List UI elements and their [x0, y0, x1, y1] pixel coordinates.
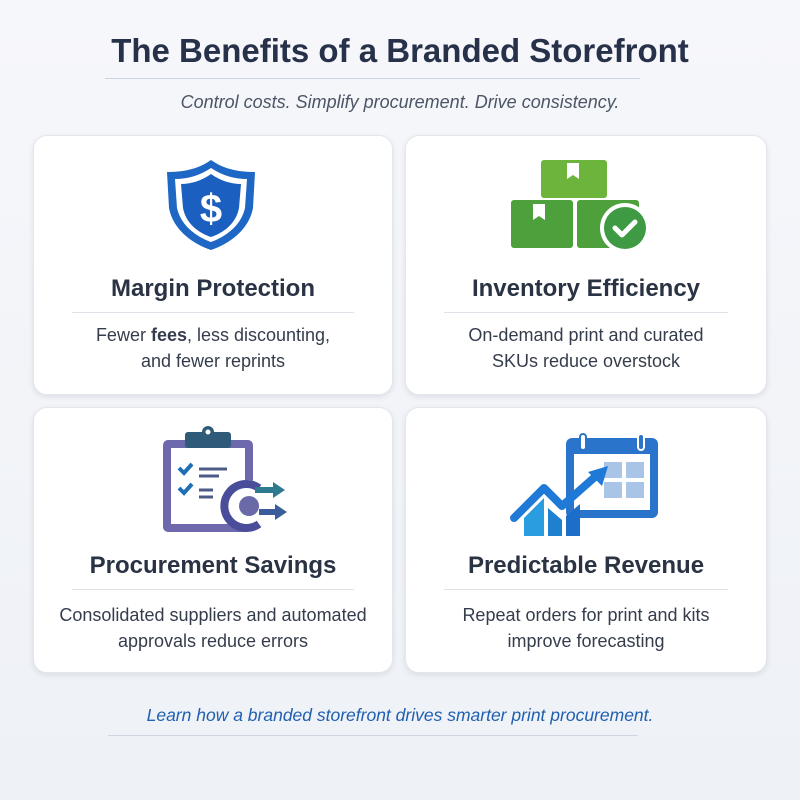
description: SKUs reduce overstock — [492, 351, 680, 371]
description: Consolidated suppliers and automated — [59, 605, 367, 625]
heading: Margin Protection — [111, 275, 315, 302]
description — [462, 605, 710, 651]
description — [59, 605, 367, 651]
panel: predictable revenue — [405, 407, 767, 673]
description: and fewer reprints — [141, 351, 285, 371]
footer link text: Learn how a branded storefront drives smarter print procurement. — [147, 705, 653, 725]
title: The Benefits of a Branded Storefront — [111, 32, 689, 69]
description: Repeat orders for print and kits — [462, 605, 710, 625]
description: On-demand print and curated — [468, 325, 704, 345]
description: improve forecasting — [507, 631, 665, 651]
heading: Procurement Savings — [90, 552, 336, 579]
subtitle: Control costs. Simplify procurement. Drive consistency. — [181, 92, 619, 112]
icon: boxes with check — [511, 160, 646, 249]
icon: shield dollar: $ — [200, 187, 222, 231]
heading: Predictable Revenue — [468, 552, 704, 579]
description: approvals reduce errors — [118, 631, 308, 651]
description: Fewer fees, less discounting, — [96, 325, 330, 345]
panel: inventory efficiency — [405, 135, 767, 395]
panel: margin protection — [33, 135, 393, 395]
panel: procurement savings — [33, 407, 393, 673]
icon: chart and calendar — [510, 433, 658, 536]
heading: Inventory Efficiency — [472, 275, 700, 302]
icon: clipboard — [163, 426, 287, 532]
icon: shield dollar — [167, 160, 255, 250]
description — [96, 325, 330, 371]
description — [468, 325, 704, 371]
